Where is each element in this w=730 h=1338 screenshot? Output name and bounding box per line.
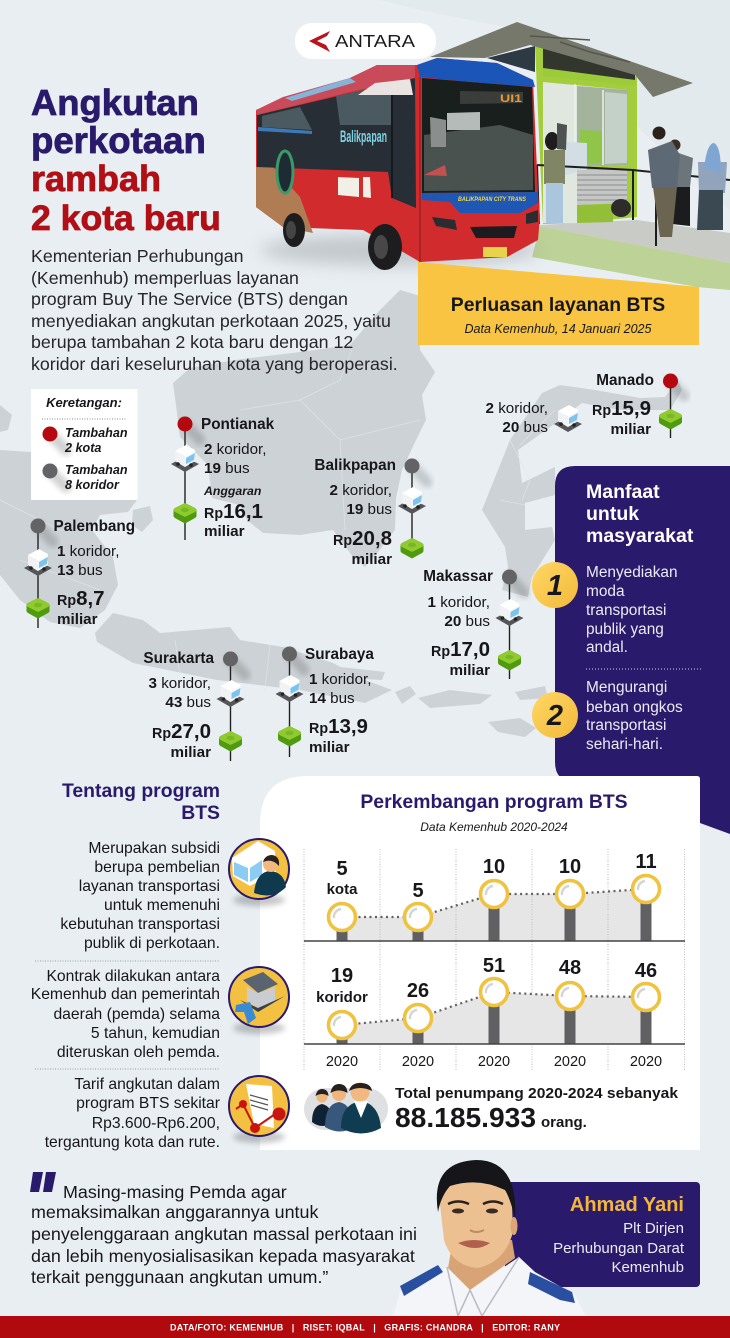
title: 2 kota baru xyxy=(31,198,221,238)
panel: Perluasan layanan BTS xyxy=(418,262,699,345)
bus blue front band xyxy=(422,192,538,213)
legend: grey dot: 8 koridor xyxy=(65,478,120,492)
islands: Nusa Tenggara xyxy=(395,686,548,737)
quote: memaksimalkan anggarannya untuk xyxy=(31,1202,318,1222)
pin: Pontianak: Anggaran xyxy=(203,484,261,498)
panel: Perluasan layanan BTS: Perluasan layanan BTS xyxy=(451,294,665,316)
platform top xyxy=(540,220,730,263)
chart: kota: 5 xyxy=(336,858,348,880)
island: Kalimantan xyxy=(173,290,435,567)
icon: bus and person xyxy=(229,839,289,906)
pin: Manado: Rp15,9 xyxy=(592,397,651,420)
heading: Manfaat: Manfaat xyxy=(586,481,660,503)
text: tarif: program BTS sekitar xyxy=(76,1095,220,1112)
bus door line xyxy=(419,77,421,262)
heading: Tentang: BTS xyxy=(181,802,220,824)
person: man in grey xyxy=(648,126,680,237)
quotation mark xyxy=(30,1172,56,1192)
pin: Palembang: Rp8,7 xyxy=(57,587,105,610)
icon: government building xyxy=(229,967,289,1034)
icon: fare receipt xyxy=(229,1076,289,1143)
pin: Surabaya xyxy=(276,646,374,757)
pin: Palembang: miliar xyxy=(57,611,98,628)
bus shelter photo xyxy=(430,22,730,290)
bus window reflections xyxy=(262,84,392,130)
pin: Manado xyxy=(486,372,684,438)
railing xyxy=(537,165,730,246)
icon: passengers xyxy=(304,1082,388,1134)
benefit 2: sehari-hari. xyxy=(586,736,663,753)
nose xyxy=(470,1230,484,1232)
pin: Palembang: Palembang xyxy=(54,518,135,535)
legend: grey dot xyxy=(42,463,128,492)
destination sign xyxy=(460,91,523,104)
benefit 2: beban ongkos xyxy=(586,699,683,716)
chart: koridor xyxy=(304,955,685,1044)
bags xyxy=(611,199,631,217)
bus windshield xyxy=(422,78,535,193)
pin: Balikpapan xyxy=(314,457,427,568)
pin: Surakarta xyxy=(143,650,245,761)
intro paragraph xyxy=(31,246,398,374)
title xyxy=(31,82,221,238)
pin: Surabaya: Rp13,9 xyxy=(309,715,368,738)
island: Java xyxy=(95,613,392,703)
name card: Ahmad Yani: Plt Dirjen xyxy=(623,1220,684,1237)
bus blue roof xyxy=(417,58,535,87)
section: Tentang program BTS xyxy=(31,780,289,1151)
bus: Balikpapan xyxy=(340,127,387,146)
legend: Keretangan: xyxy=(46,395,122,410)
chart: koridor: 51 xyxy=(483,955,505,977)
quote xyxy=(30,1172,417,1287)
chart: koridor: koridor xyxy=(316,989,368,1006)
green lower wall xyxy=(577,204,613,223)
text: subsidi xyxy=(60,840,220,952)
pin: Surakarta: miliar xyxy=(170,744,211,761)
pin: Makassar xyxy=(423,568,524,679)
panel: Manfaat untuk masyarakat xyxy=(532,466,730,834)
portrait: Ahmad Yani xyxy=(393,1160,586,1316)
text: subsidi: Merupakan subsidi xyxy=(88,840,220,857)
benefit 1: transportasi xyxy=(586,602,666,619)
chart: kota: 11 xyxy=(635,851,657,873)
text: tarif: Rp3.600-Rp6.200, xyxy=(92,1115,220,1132)
bus mirror xyxy=(557,123,567,150)
benefit 1 xyxy=(532,562,678,656)
chart: koridor: 46 xyxy=(635,960,657,982)
text: subsidi: berupa pembelian xyxy=(94,859,220,876)
chart: koridor: 19 xyxy=(331,965,353,987)
chart: koridor: 26 xyxy=(407,980,429,1002)
quote: terkait penggunaan angkutan umum.” xyxy=(31,1267,328,1287)
bus: BALIKPAPAN CITY TRANS xyxy=(458,197,526,203)
total passengers: 88.185.933 xyxy=(395,1102,536,1133)
province lines xyxy=(0,350,555,690)
pin: Makassar: Rp17,0 xyxy=(431,638,490,661)
background: misty trees xyxy=(380,0,730,210)
pin: Pontianak xyxy=(171,416,275,540)
hair xyxy=(437,1160,515,1218)
logo: ANTARA: ANTARA xyxy=(335,31,415,51)
pin: Surakarta: Rp27,0 xyxy=(152,720,211,743)
benefit 1: 1 xyxy=(547,570,563,602)
pin: Manado: Manado xyxy=(596,372,654,389)
pin: Balikpapan: Balikpapan xyxy=(314,457,396,474)
chart: kota: 10 xyxy=(483,856,505,878)
text: kontrak xyxy=(31,968,220,1061)
text: kontrak: daerah (pemda) selama xyxy=(53,1006,220,1023)
chart heading: Perkembangan program BTS xyxy=(360,791,628,813)
pin: Pontianak: miliar xyxy=(204,523,245,540)
text: kontrak: Kemenhub dan pemerintah xyxy=(31,986,220,1003)
shelter glass xyxy=(543,82,628,223)
heading: Manfaat: untuk xyxy=(586,503,639,525)
bus rear wheel xyxy=(283,213,305,247)
person: girl xyxy=(544,132,565,223)
text: tarif: tergantung kota dan rute. xyxy=(45,1134,220,1151)
pin: Palembang xyxy=(24,518,135,628)
pin: Pontianak: Pontianak xyxy=(201,416,275,433)
shelter roof xyxy=(430,22,693,97)
text: tarif: Tarif angkutan dalam xyxy=(74,1076,220,1093)
bus front wheel xyxy=(368,224,402,270)
legend: red dot: 2 kota xyxy=(64,441,101,455)
ear xyxy=(510,1217,518,1235)
chart: kota xyxy=(304,849,685,1070)
pin: Makassar: miliar xyxy=(449,662,490,679)
heading: Manfaat xyxy=(586,481,694,547)
text: kontrak: Kontrak dilakukan antara xyxy=(46,968,220,985)
total passengers: Total penumpang 2020-2024 sebanyak xyxy=(395,1085,679,1102)
bus roof xyxy=(256,65,415,115)
name card: Ahmad Yani: Kemenhub xyxy=(611,1259,684,1276)
title: rambah xyxy=(31,158,161,199)
person: woman in hijab xyxy=(697,143,727,230)
quote: penyelenggaraan angkutan massal perkotaan ini xyxy=(31,1224,417,1244)
intro paragraph: (Kemenhub) memperluas layanan xyxy=(31,268,299,288)
name card: Ahmad Yani xyxy=(505,1182,700,1287)
kiosk xyxy=(565,142,587,175)
face xyxy=(440,1168,513,1268)
island: Sumatra xyxy=(0,450,137,628)
chart: year axis xyxy=(326,1054,662,1070)
pin: Surakarta: 43 bus xyxy=(165,694,211,711)
bus xyxy=(256,58,567,270)
pin: Manado: miliar xyxy=(610,421,651,438)
pin: Surakarta: Surakarta xyxy=(143,650,214,667)
legend xyxy=(31,389,138,500)
pin: Palembang: 1 koridor, xyxy=(57,543,119,560)
benefit 1: publik yang xyxy=(586,621,664,638)
bus: UI1 xyxy=(500,93,522,105)
shelter truss xyxy=(543,47,635,76)
epaulettes xyxy=(400,1265,443,1296)
chart: year axis: 2020 xyxy=(402,1054,434,1070)
chart: year axis: 2020 xyxy=(326,1054,358,1070)
shelter wall xyxy=(535,45,637,224)
pin: Pontianak: Rp16,1 xyxy=(204,500,263,523)
islands: small western islands xyxy=(0,405,153,532)
pin: Surabaya: 1 koridor, xyxy=(309,671,371,688)
intro paragraph: koridor dari keseluruhan kota yang beroperasi. xyxy=(31,354,398,374)
island: Sulawesi xyxy=(482,380,682,597)
pin: Balikpapan: 2 koridor, xyxy=(330,482,392,499)
shirt xyxy=(393,1257,586,1316)
text: subsidi: untuk memenuhi xyxy=(104,897,220,914)
quote: dan lebih menyosialisasikan kepada masyarakat xyxy=(31,1246,415,1266)
text: subsidi: kebutuhan transportasi xyxy=(60,916,220,933)
pin: Makassar: Makassar xyxy=(423,568,493,585)
bus rear batik xyxy=(256,167,313,233)
pin: Surabaya: 14 bus xyxy=(309,690,355,707)
name card: Ahmad Yani: Perhubungan Darat xyxy=(553,1240,685,1257)
pin: Makassar: 1 koridor, xyxy=(428,594,490,611)
text: kontrak: diteruskan oleh pemda. xyxy=(57,1044,220,1061)
bus logo text block xyxy=(338,177,359,197)
pin: Surabaya: Surabaya xyxy=(305,646,374,663)
title: perkotaan xyxy=(31,120,206,161)
pin: Balikpapan: 19 bus xyxy=(346,501,392,518)
benefit 1: moda xyxy=(586,583,625,600)
intro paragraph: Kementerian Perhubungan xyxy=(31,246,244,266)
brows and eyes xyxy=(448,1202,503,1204)
platform side xyxy=(532,226,730,290)
name card: Ahmad Yani: Ahmad Yani xyxy=(570,1194,684,1216)
pin: Manado: 2 koridor, xyxy=(486,400,548,417)
intro paragraph: program Buy The Service (BTS) dengan xyxy=(31,289,348,309)
collar xyxy=(447,1257,519,1316)
person: man behind xyxy=(670,140,693,226)
logo: ANTARA xyxy=(295,23,436,59)
benefit 2: Mengurangi xyxy=(586,679,667,696)
chart: kota: 5 xyxy=(412,880,424,902)
bus grille xyxy=(470,226,517,238)
pin: Balikpapan: Rp20,8 xyxy=(333,527,392,550)
pin: Palembang: 13 bus xyxy=(57,562,103,579)
footer bar: DATA/FOTO: KEMENHUB | RISET: IQBAL | GRAFIS: CHANDRA | EDITOR: RANY xyxy=(170,1322,560,1332)
text: subsidi: publik di perkotaan. xyxy=(84,935,220,952)
benefit 2: transportasi xyxy=(586,717,666,734)
benefit 1: Menyediakan xyxy=(586,564,678,581)
chart: kota: 10 xyxy=(559,856,581,878)
footer bar xyxy=(0,1316,730,1338)
chart source: Data Kemenhub 2020-2024 xyxy=(420,820,568,834)
neck xyxy=(448,1240,515,1290)
panel: Perluasan layanan BTS: Data Kemenhub, 14 Januari 2025 xyxy=(465,322,652,336)
panel: Perkembangan program BTS xyxy=(260,776,700,1150)
heading: Tentang xyxy=(62,780,220,824)
logo mark xyxy=(309,31,330,52)
benefit 2 xyxy=(532,679,683,753)
chart: kota: kota xyxy=(327,881,358,898)
bus emblem xyxy=(277,151,293,193)
text: tarif xyxy=(45,1076,220,1151)
benefit 1: andal. xyxy=(586,639,628,656)
chart: year axis: 2020 xyxy=(630,1054,662,1070)
louvers xyxy=(577,170,627,205)
pin: Surakarta: 3 koridor, xyxy=(149,675,211,692)
island: Madura xyxy=(340,667,385,680)
mouth xyxy=(458,1240,490,1248)
heading: Tentang: Tentang program xyxy=(62,780,220,802)
bus body xyxy=(256,58,540,262)
legend: red dot: Tambahan xyxy=(65,426,128,440)
pin: Balikpapan: miliar xyxy=(351,551,392,568)
chart: koridor: 48 xyxy=(559,957,581,979)
text: kontrak: 5 tahun, kemudian xyxy=(91,1025,220,1042)
benefit 2: 2 xyxy=(546,700,563,732)
bus side windows xyxy=(257,78,416,208)
pin: Surabaya: miliar xyxy=(309,739,350,756)
bus plate xyxy=(483,247,507,257)
pin: Makassar: 20 bus xyxy=(444,613,490,630)
chart: year axis: 2020 xyxy=(554,1054,586,1070)
pin: Pontianak: 19 bus xyxy=(204,460,250,477)
legend: grey dot: Tambahan xyxy=(65,463,128,477)
title: Angkutan xyxy=(31,82,199,123)
heading: Manfaat: masyarakat xyxy=(586,525,694,547)
pin: Manado: 20 bus xyxy=(502,419,548,436)
intro paragraph: berupa tambahan 2 kota baru dengan 12 xyxy=(31,332,353,352)
quote: Masing-masing Pemda agar xyxy=(63,1182,287,1202)
total passengers: orang. xyxy=(541,1114,587,1131)
pin: Pontianak: 2 koridor, xyxy=(204,441,266,458)
text: subsidi: layanan transportasi xyxy=(79,878,220,895)
total passengers xyxy=(395,1085,679,1133)
chart: year axis: 2020 xyxy=(478,1054,510,1070)
map of Indonesia xyxy=(0,290,682,737)
legend: red dot xyxy=(42,426,128,455)
intro paragraph: menyediakan angkutan perkotaan 2025, yaitu xyxy=(31,311,391,331)
